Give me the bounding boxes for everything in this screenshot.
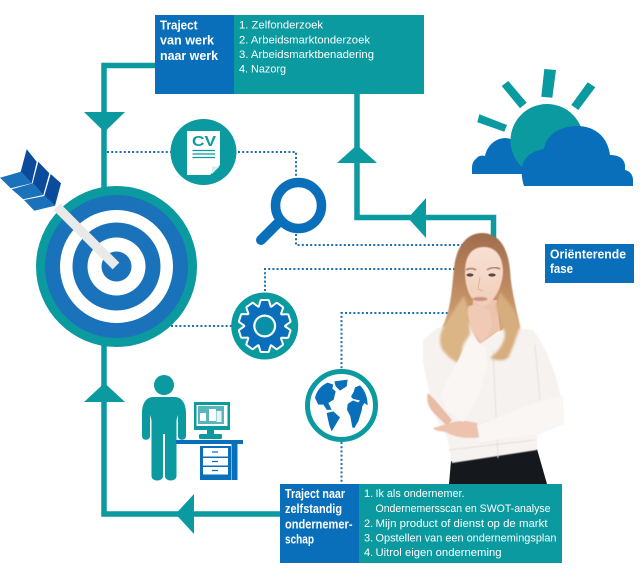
arrow: down into target [84,112,125,132]
neck [470,300,500,345]
icon: CV document [170,119,236,185]
arrow: up into target [84,383,125,402]
box: Traject naar zelfstandig ondernemerschap: Mijn product of dienst op de markt [376,518,548,530]
icon: magnifier [261,182,322,240]
small cloud [472,138,524,174]
arrow: left along bottom line [176,494,194,534]
box: Orienterende fase: Oriënterende [550,248,626,262]
eyes and brows [466,268,500,270]
nose and mouth [478,277,483,291]
box: Traject van werk naar werk: 4. Nazorg [239,64,286,76]
lower sleeve [477,395,563,443]
shoulder hair left [440,296,470,364]
box: Traject naar zelfstandig ondernemerschap: ondernemer- [285,518,352,532]
box: Traject naar zelfstandig ondernemerschap: 3. [364,532,373,544]
arrow in target [0,149,116,266]
big cloud [522,126,633,186]
box: Traject van werk naar werk: 3. Arbeidsmarktbenadering [239,49,374,61]
box: Traject naar zelfstandig ondernemerschap: Uitrol eigen onderneming [376,547,502,559]
lower hand [433,421,481,438]
sun [510,104,584,177]
shoulder hair right [490,292,520,360]
flow line: person to top box [337,93,494,240]
flow line: bottom box to target [84,345,281,534]
back hair [437,233,520,360]
dotted connectors [107,152,465,484]
flow line: top box to target [84,66,155,190]
icon: sun and clouds [472,69,633,186]
box: Traject naar zelfstandig ondernemerschap: Traject naar [285,487,345,501]
box: Traject naar zelfstandig ondernemerschap: Opstellen van een ondernemingsplan [376,532,556,544]
photo: thinking woman [423,233,563,484]
box: Traject naar zelfstandig ondernemerschap: zelfstandig [285,502,342,516]
box: Traject van werk naar werk: 1. Zelfonderzoek [239,20,324,32]
thinking hand [468,305,491,341]
icon: person at desk [142,375,243,480]
shirt body [423,322,563,463]
target [36,186,197,347]
box: Traject van werk naar werk: 2. Arbeidsmarktonderzoek [239,34,371,46]
box: Traject van werk naar werk: van werk [160,34,214,48]
box: Traject naar zelfstandig ondernemerschap: 4. [364,547,373,559]
arrow: left from person [408,198,426,238]
shirt folds [449,345,563,458]
box: Orienterende fase: fase [550,262,573,276]
box: Traject naar zelfstandig ondernemerschap: 1. [364,488,373,500]
icon: globe [308,372,376,440]
box: Traject naar zelfstandig ondernemerschap [280,484,562,563]
box: Traject naar zelfstandig ondernemerschap: schap [285,532,314,546]
box: Orienterende fase [545,244,634,283]
box: Traject van werk naar werk: naar werk [160,49,218,63]
face [465,247,503,307]
box: Traject van werk naar werk [155,15,424,94]
icon: CV document: CV [192,134,216,150]
desk [176,440,243,480]
box: Traject naar zelfstandig ondernemerschap: Ik als ondernemer. [376,488,464,500]
box: Traject naar zelfstandig ondernemerschap: 2. [364,518,373,530]
sun rays [477,114,507,132]
skirt [449,449,547,484]
box: Traject van werk naar werk: Traject [160,18,198,32]
raised forearm sleeve [440,337,488,422]
computer [194,402,230,430]
arrow: up to top box [337,145,377,163]
box: Traject naar zelfstandig ondernemerschap: Ondernemersscan en SWOT-analyse [376,503,550,515]
icon: gear [231,292,298,360]
